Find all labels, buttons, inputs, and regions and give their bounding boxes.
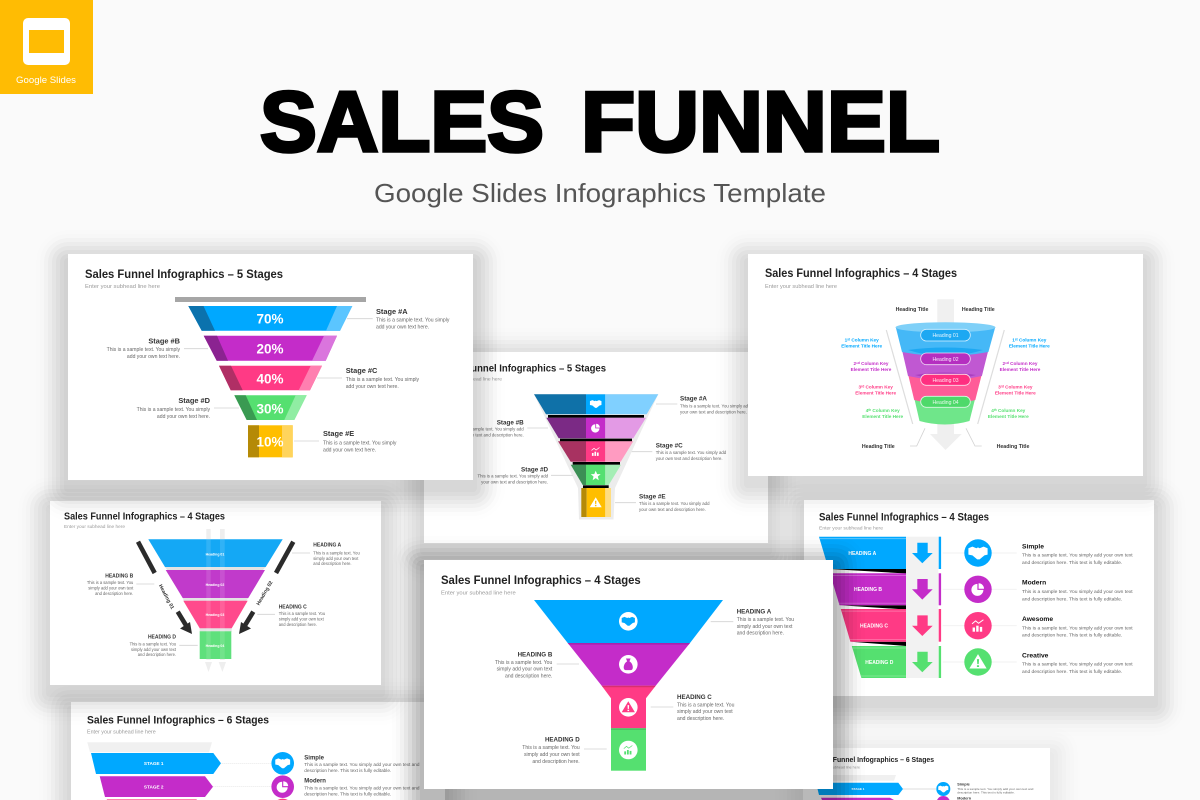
slide heading: Sales Funnel Infographics – 4 Stages [64, 512, 225, 523]
label: Stage #E [294, 429, 397, 454]
icon: chart [619, 741, 638, 759]
funnel bands: HEADING D [865, 660, 894, 666]
label: Stage #D: This is a sample text. You simply add [478, 474, 549, 479]
arrow: stage 1: STAGE 1 [144, 761, 164, 766]
text: Awesome [1022, 616, 1133, 639]
label: heading A: and description here. [313, 561, 352, 566]
text: Creative: Creative [1022, 652, 1049, 659]
arrow: right [239, 542, 293, 634]
labels: top heading titles: Heading Title [962, 307, 995, 313]
labels: right column keys: 4ᵗʰ Column Key [991, 408, 1026, 413]
label: heading B [87, 574, 154, 596]
icon: slides logo [23, 18, 70, 65]
labels: bottom heading titles [862, 428, 1030, 450]
label: heading C [257, 604, 325, 627]
pill: Heading 03: Heading 03 [932, 378, 959, 384]
slide subhead: Enter your subhead line here [813, 766, 860, 770]
label: Stage #B: your own text and description here. [457, 433, 524, 438]
funnel: stage B 20% [204, 336, 337, 361]
icon: pie circle [937, 796, 950, 800]
icon: pie circle [271, 775, 294, 798]
labels: left column keys: 3ʳᵈ Column Key [859, 385, 893, 390]
label: Stage #D: add your own text here. [157, 414, 210, 420]
main title: FUNNEL [581, 75, 940, 170]
labels: right column keys [988, 338, 1050, 419]
slide subhead: Enter your subhead line here [438, 377, 502, 382]
label: heading B: and description here. [95, 591, 133, 596]
label: Stage #D: Stage #D [521, 466, 548, 473]
gray column [906, 537, 938, 678]
label: heading A: This is a sample text. You [313, 550, 360, 556]
text: Simple: This is a sample text. You simply add your own text [1022, 553, 1133, 559]
funnel arrows: STAGE 1 [851, 787, 865, 791]
labels: right column keys: 3ʳᵈ Column Key [998, 385, 1033, 390]
text: Modern [1022, 580, 1133, 602]
label: heading D: and description here. [138, 652, 176, 657]
funnel: Heading 01 [206, 552, 224, 556]
main title [260, 75, 940, 170]
label: heading C: HEADING C [279, 604, 307, 610]
label: Stage #D: Stage #D [178, 396, 211, 405]
labels: right column keys: 2ⁿᵈ Column Key [1003, 361, 1038, 366]
funnel: stage B 20%: 20% [256, 342, 284, 356]
label: heading B: and description here. [505, 674, 552, 680]
labels: bottom heading titles: Heading Title [997, 444, 1030, 450]
panel: 6 stages bottom left [71, 702, 445, 800]
text: Simple: description here. This text is fully editable. [957, 791, 1015, 795]
label: Stage #A: Stage #A [376, 307, 408, 316]
funnel: Heading 04 [206, 644, 224, 648]
text: Modern: and description here. This text is fully editable. [1022, 596, 1122, 602]
label: heading B: This is a sample text. You [495, 660, 552, 666]
icon: handshake circle [964, 539, 992, 567]
funnel bands [819, 537, 906, 678]
label: Stage #D [137, 396, 239, 420]
pill: Heading 03 [921, 374, 970, 385]
funnel bands: HEADING B [854, 587, 882, 593]
slide heading: Sales Funnel Infographics – 4 Stages [441, 573, 641, 587]
panel: 6 stages small bottom right [803, 748, 1050, 800]
text: Simple [1022, 543, 1133, 566]
text: Simple: Simple [304, 755, 325, 761]
panel: 4 stages top right cup funnel [748, 254, 1143, 476]
label: Stage #E: add your own text here. [323, 448, 376, 454]
labels: right column keys: Element Title Here [995, 390, 1036, 396]
label: Stage #A: your own text and description here. [680, 409, 747, 414]
text: Modern: This is a sample text. You simply add your own text [1022, 589, 1133, 595]
text: Creative: and description here. This text is fully editable. [1022, 669, 1122, 675]
panel: 5 stages top left percent funnel [68, 254, 473, 480]
funnel: stage A 70% [188, 306, 352, 331]
funnel: Heading 03 [206, 613, 224, 617]
label: heading D [522, 736, 607, 765]
label: heading C: This is a sample text. You [677, 702, 735, 708]
slide subhead: Enter your subhead line here [819, 525, 883, 530]
label: Stage #B [453, 419, 548, 438]
icon: warning [590, 497, 602, 507]
slide subhead: Enter your subhead line here [64, 524, 126, 529]
label: heading D: simply add your own text [131, 647, 177, 652]
slide subhead: Enter your subhead line here [85, 284, 160, 290]
label: heading D: simply add your own text [524, 752, 580, 758]
label: heading D: HEADING D [148, 635, 176, 641]
labels: left column keys: 4ᵗʰ Column Key [866, 408, 900, 413]
label: Stage #E [615, 494, 710, 512]
label: Stage #E: your own text and description here. [639, 507, 706, 512]
labels: top heading titles [896, 307, 995, 313]
label: heading C: simply add your own text [279, 616, 325, 622]
text: Awesome: and description here. This text is fully editable. [1022, 633, 1122, 639]
slide heading: Sales Funnel Infographics – 5 Stages [85, 267, 283, 281]
top bar [175, 297, 366, 302]
icon: chart [592, 448, 599, 456]
icon: chart circle [964, 612, 992, 639]
icon: warning circle [964, 648, 992, 676]
pill: Heading 01: Heading 01 [932, 333, 959, 339]
label: Stage #B [107, 336, 208, 360]
text: Creative: This is a sample text. You simply add your own text [1022, 662, 1133, 668]
funnel: Heading 02 [206, 583, 224, 587]
label: heading B [495, 652, 579, 680]
funnel: stage D [611, 728, 646, 771]
label: Stage #C: This is a sample text. You simply add [656, 450, 727, 455]
label: heading A: and description here. [737, 630, 784, 636]
label: heading C: HEADING C [677, 694, 712, 701]
funnel: stage A [534, 600, 723, 643]
label: Stage #B: add your own text here. [127, 354, 180, 360]
panel: 4 stages center solid funnel [424, 560, 833, 789]
labels: top heading titles: Heading Title [896, 307, 929, 313]
pill: Heading 04: Heading 04 [932, 400, 959, 406]
label: heading D [130, 635, 198, 657]
label: Stage #A: This is a sample text. You simply [376, 318, 450, 324]
pill: Heading 02: Heading 02 [932, 357, 959, 363]
funnel: stage E 10% [248, 425, 293, 457]
label: heading A: HEADING A [313, 543, 342, 549]
funnel [534, 394, 658, 520]
icon: pie [591, 424, 600, 433]
label: heading B: This is a sample text. You [87, 580, 133, 585]
label: Stage #E: Stage #E [323, 429, 354, 438]
labels: left column keys: Element Title Here [841, 344, 882, 348]
arrow: right: Heading 02 [256, 580, 274, 607]
label: Stage #A: Stage #A [680, 395, 707, 402]
icon: pie circle [964, 576, 992, 603]
labels: left column keys: 1ˢᵗ Column Key [845, 338, 879, 342]
label: heading B: HEADING B [518, 652, 553, 658]
labels: left column keys: 2ⁿᵈ Column Key [854, 361, 889, 366]
icon: star [591, 471, 601, 480]
arrow: stage 2 [100, 776, 213, 797]
label: Stage #C: Stage #C [346, 366, 378, 375]
slide heading: Sales Funnel Infographics – 6 Stages [813, 755, 934, 764]
label: heading B: simply add your own text [497, 666, 553, 672]
funnel: stage C 40%: 40% [256, 372, 284, 386]
label: heading C: This is a sample text. You [279, 611, 325, 616]
slide subhead: Enter your subhead line here [441, 591, 516, 597]
label: heading D: This is a sample text. You [522, 745, 580, 751]
icon: handshake [619, 612, 638, 631]
funnel arrows [812, 775, 936, 800]
funnel: stage D 30%: 30% [256, 402, 284, 416]
icon: handshake [590, 400, 601, 408]
text: Simple: Simple [957, 783, 970, 787]
funnel: stage C 40% [219, 366, 322, 390]
labels: left column keys [841, 338, 903, 419]
labels: right column keys: Element Title Here [988, 414, 1029, 419]
pill: Heading 02 [921, 353, 970, 365]
label: Stage #B: Stage #B [497, 419, 524, 426]
label: Stage #D: your own text and description here. [481, 480, 548, 485]
labels: right column keys: Element Title Here [1000, 367, 1041, 372]
label: heading C: simply add your own text [677, 709, 733, 715]
label: Stage #A: This is a sample text. You simply add [680, 403, 751, 408]
funnel: stage E 10%: 10% [256, 434, 284, 450]
label: Stage #A [656, 395, 751, 414]
side bars [939, 537, 941, 678]
labels: right column keys: Element Title Here [1009, 344, 1050, 348]
label: heading A: simply add your own text [737, 624, 793, 630]
labels: right column keys: 1ˢᵗ Column Key [1012, 338, 1047, 342]
labels: bottom heading titles: Heading Title [862, 444, 895, 450]
label: Stage #C [632, 442, 727, 461]
text: Awesome: This is a sample text. You simply add your own text [1022, 625, 1133, 631]
text: Modern [304, 779, 420, 796]
labels: left column keys: Element Title Here [862, 414, 903, 419]
arrow: stage 1 [91, 753, 221, 774]
label: Stage #B: This is a sample text. You simply add [453, 427, 524, 432]
text: Awesome: Awesome [1022, 616, 1053, 623]
label: heading B: simply add your own text [88, 586, 134, 590]
slide heading: Sales Funnel Infographics – 4 Stages [819, 512, 989, 524]
arrow: stage 2: STAGE 2 [144, 784, 164, 790]
funnel: stage C [602, 686, 656, 728]
icon: warning [619, 698, 638, 717]
label: heading D: This is a sample text. You [130, 642, 176, 646]
text: Simple [957, 783, 1034, 800]
slide heading: Sales Funnel Infographics – 5 Stages [438, 364, 606, 375]
label: heading A: This is a sample text. You [737, 617, 794, 623]
label: Stage #C: This is a sample text. You simply [346, 377, 420, 383]
label: heading C [651, 694, 735, 722]
text: Simple: description here. This text is fully editable. [304, 768, 391, 773]
labels: left column keys: Element Title Here [851, 367, 892, 372]
text: Modern: Modern [304, 779, 326, 785]
label: heading D: and description here. [532, 759, 580, 765]
arrow: bottom out [930, 424, 962, 450]
text: Simple [304, 755, 420, 773]
slide heading: Sales Funnel Infographics – 6 Stages [87, 714, 269, 726]
funnel bands: HEADING A [848, 551, 877, 557]
label: heading A [292, 543, 360, 566]
label: Stage #D: This is a sample text. You simply [137, 407, 210, 413]
label: Stage #A [347, 307, 450, 331]
funnel: stage B [568, 643, 690, 686]
label: heading D: HEADING D [545, 736, 580, 744]
funnel cup [896, 322, 996, 424]
funnel: stage D 30% [234, 395, 307, 420]
panel: 5 stages middle with icons [424, 352, 768, 543]
panel: 4 stages right with arrows and circles [804, 500, 1154, 696]
text: Simple: and description here. This text is fully editable. [1022, 560, 1122, 566]
funnel [148, 529, 283, 672]
label: heading C: and description here. [279, 622, 317, 627]
arrow: top in [937, 299, 954, 327]
slide subhead: Enter your subhead line here [765, 284, 837, 290]
label: Stage #C: your own text and description here. [656, 456, 723, 461]
pill: Heading 04 [921, 396, 970, 407]
label: heading A [711, 608, 794, 636]
funnel: stage A 70%: 70% [256, 312, 284, 326]
label: Stage #E: This is a sample text. You simply [323, 441, 397, 447]
badge label: Google Slides [16, 75, 76, 86]
panel: 4 stages left with arrows [50, 501, 381, 685]
label: Stage #E: Stage #E [639, 494, 666, 501]
label: Stage #B: This is a sample text. You simply [107, 347, 180, 353]
icon: money bag [619, 655, 638, 674]
label: Stage #D [478, 466, 573, 485]
main title: SALES [260, 75, 544, 170]
text: Modern: This is a sample text. You simply add your own text and [304, 785, 420, 790]
icon: arrow A [912, 543, 933, 563]
arrow: left: Heading 01 [157, 584, 175, 611]
pill: Heading 01 [921, 329, 970, 341]
icon: handshake circle [271, 752, 294, 775]
arrow: left [138, 542, 192, 634]
funnel top cap [87, 742, 212, 752]
label: heading B: HEADING B [105, 574, 134, 580]
label: heading A: HEADING A [737, 608, 772, 616]
icon: arrow D [912, 652, 933, 672]
icon: arrow C [912, 615, 933, 636]
badge: Google Slides [0, 0, 93, 94]
text: Simple: Simple [1022, 543, 1044, 550]
label: heading A: simply add your own text [313, 556, 359, 561]
text: Creative [1022, 652, 1133, 675]
slide subhead: Enter your subhead line here [87, 729, 156, 735]
label: Stage #B: Stage #B [148, 336, 180, 346]
text: Simple: This is a sample text. You simply add your own text and [957, 787, 1034, 791]
slide heading: Sales Funnel Infographics – 4 Stages [765, 266, 957, 280]
label: Stage #C: Stage #C [656, 442, 683, 449]
labels: left column keys: Element Title Here [855, 390, 896, 396]
subtitle: Google Slides Infographics Template [374, 178, 826, 208]
label: Stage #C [317, 366, 420, 390]
label: heading C: and description here. [677, 716, 724, 722]
label: Stage #E: This is a sample text. You simply add [639, 501, 710, 506]
label: Stage #C: add your own text here. [346, 384, 399, 390]
icon: handshake circle [936, 782, 950, 796]
text: Modern: Modern [1022, 580, 1046, 587]
arrow: stage 3 [107, 799, 197, 800]
funnel bands: HEADING C [860, 624, 888, 630]
text: Modern: description here. This text is fully editable. [304, 791, 391, 796]
label: Stage #A: add your own text here. [376, 325, 429, 331]
icon: arrow B [912, 579, 933, 600]
text: Simple: This is a sample text. You simply add your own text and [304, 762, 420, 767]
